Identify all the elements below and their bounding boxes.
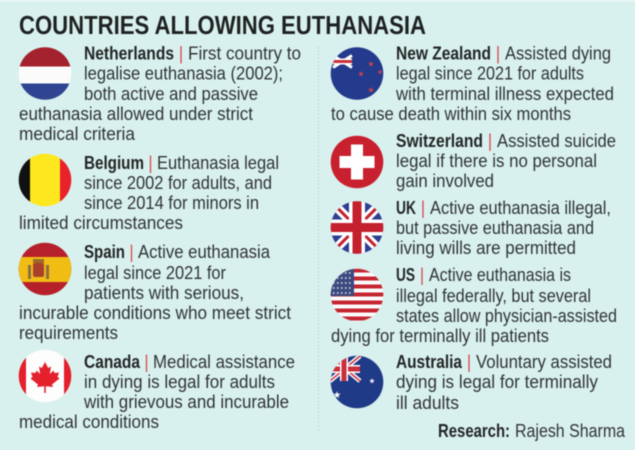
text: US: dying for terminally ill patients [331,326,549,346]
text: Switzerland: Assisted suicide [497,131,616,151]
text: Spain [19,242,291,343]
text: US: illegal federally, but several [396,286,591,306]
text: New Zealand: | [496,44,500,64]
text: Switzerland: gain involved [396,171,494,191]
text: Netherlands: euthanasia allowed under strict [19,104,253,124]
icon: US flag [330,268,384,322]
text: New Zealand: with terminal illness expected [395,84,614,104]
text: Canada: medical conditions [19,412,159,432]
text: Belgium: limited circumstances [19,213,183,233]
text: Spain: incurable conditions who meet strict [19,303,291,323]
panel: Netherlands [18,44,301,144]
text: Netherlands: Netherlands [84,44,174,64]
text: Switzerland [396,131,616,191]
text: Spain: legal since 2021 for [84,263,226,283]
text: New Zealand: legal since 2021 for adults [396,64,584,84]
text: Switzerland: Switzerland [396,131,483,151]
text: Belgium: Euthanasia legal [157,153,279,173]
credit [438,421,626,441]
text: Netherlands: medical criteria [19,124,136,144]
text: Australia: | [467,352,471,372]
text: New Zealand: Assisted dying [505,44,611,64]
text: US: | [420,265,424,285]
text: Belgium [19,153,279,233]
text: Netherlands: First country to [188,44,301,64]
text: Canada: Canada [84,352,141,372]
text: Belgium: Belgium [84,153,144,173]
text: US: US [396,265,415,285]
text: Canada: in dying is legal for adults [84,372,275,392]
text: UK: UK [396,198,416,218]
text: Spain: requirements [19,323,118,343]
text: Switzerland: legal if there is no personal [396,151,597,171]
panel: US [330,265,617,346]
text: Spain: Active euthanasia [138,242,271,262]
text: UK: | [421,198,425,218]
text: Canada: Medical assistance [153,352,295,372]
text: UK: living wills are permitted [396,238,576,258]
text: Australia: dying is legal for terminally [396,372,598,392]
text: New Zealand: New Zealand [396,44,491,64]
panel: New Zealand [330,44,614,124]
icon: Switzerland flag [330,135,384,189]
text: Canada: with grievous and incurable [83,392,289,412]
text: US: Active euthanasia is [429,265,571,285]
text: Australia: ill adults [396,393,459,413]
text: Australia: Australia [396,352,463,372]
text: Australia [396,352,612,413]
text: Netherlands: | [179,44,183,64]
text: Belgium: since 2002 for adults, and [84,173,272,193]
icon: New Zealand flag [330,46,384,100]
text: Netherlands: legalise euthanasia (2002); [84,64,283,84]
title: COUNTRIES ALLOWING EUTHANASIA [19,12,426,40]
text: Australia: Voluntary assisted [476,352,612,372]
text: UK: Active euthanasia illegal, [430,198,611,218]
panel: UK [330,198,611,258]
panel: Belgium [18,153,279,233]
text: Netherlands [19,44,301,144]
text: Switzerland: | [488,131,492,151]
text: Spain: Spain [84,242,125,262]
text: UK [396,198,611,258]
icon: Belgium flag [18,153,72,207]
panel: Switzerland [330,131,616,191]
text: Spain: patients with serious, [84,283,244,303]
icon: Canada flag [18,349,72,403]
panel: Spain [18,242,291,343]
icon: Netherlands flag [18,46,72,100]
text: New Zealand [331,44,614,124]
text: Spain: | [130,242,134,262]
icon: UK flag [330,200,384,254]
panel: Australia [330,352,612,413]
icon: Spain flag [18,242,72,296]
icon: Australia flag [330,355,384,409]
text: Canada [19,352,295,432]
credit: Research: [438,421,510,441]
text: US [331,265,617,346]
text: Netherlands: both active and passive [84,84,258,104]
text: Belgium: | [148,153,152,173]
text: New Zealand: to cause death within six months [331,104,571,124]
panel: Canada [18,349,295,432]
text: US: states allow physician-assisted [396,306,617,326]
text: Belgium: since 2014 for minors in [84,193,259,213]
text: Canada: | [144,352,148,372]
text: UK: but passive euthanasia and [396,218,594,238]
